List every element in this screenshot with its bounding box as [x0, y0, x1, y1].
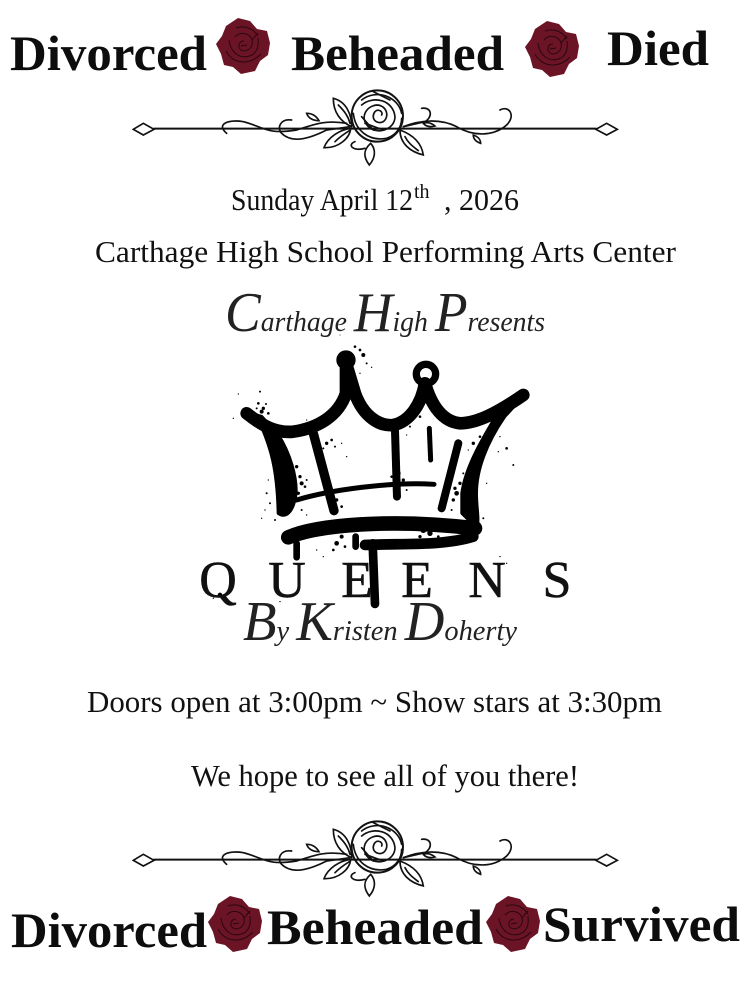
icon: top right rose: [525, 21, 579, 77]
heading: top row: Divorced: [10, 25, 207, 81]
heading: bottom row: [11, 896, 740, 958]
script text: author: By Kristen Doherty: [243, 591, 517, 653]
heading: top row: Beheaded: [291, 25, 504, 81]
text: date: [231, 181, 519, 217]
text: date: Sunday April 12: [231, 182, 413, 217]
text: date: , 2026: [444, 182, 519, 217]
heading: bottom row: Divorced: [11, 902, 207, 958]
text: door and show times: Doors open at 3:00pm ~ Show stars at 3:30pm: [87, 684, 662, 719]
ornament: bottom rose divider: [133, 821, 617, 896]
text: venue: Carthage High School Performing Arts Center: [95, 234, 677, 269]
icon: bottom right rose: [486, 896, 540, 952]
title: QUEENS: E: [341, 552, 373, 609]
title: QUEENS: N: [468, 552, 506, 609]
title: QUEENS: S: [543, 552, 571, 609]
crown splatter: [213, 334, 514, 602]
heading: bottom row: Survived: [543, 896, 740, 952]
title: QUEENS: E: [401, 552, 433, 609]
heading: top row: [10, 20, 709, 81]
text: date: th: [414, 181, 430, 203]
heading: bottom row: Beheaded: [267, 899, 483, 955]
ornament: top rose divider: [133, 90, 617, 165]
title: QUEENS: [199, 552, 571, 609]
script heading: presenter: Carthage High Presents: [225, 282, 545, 344]
icon: bottom left rose: [208, 896, 262, 952]
title: QUEENS: Q: [199, 552, 237, 609]
title: QUEENS: U: [268, 552, 306, 609]
icon: dripping crown: [213, 334, 523, 604]
text: closing invitation: We hope to see all of you there!: [191, 758, 579, 793]
heading: top row: Died: [607, 20, 709, 76]
icon: top left rose: [216, 18, 270, 74]
